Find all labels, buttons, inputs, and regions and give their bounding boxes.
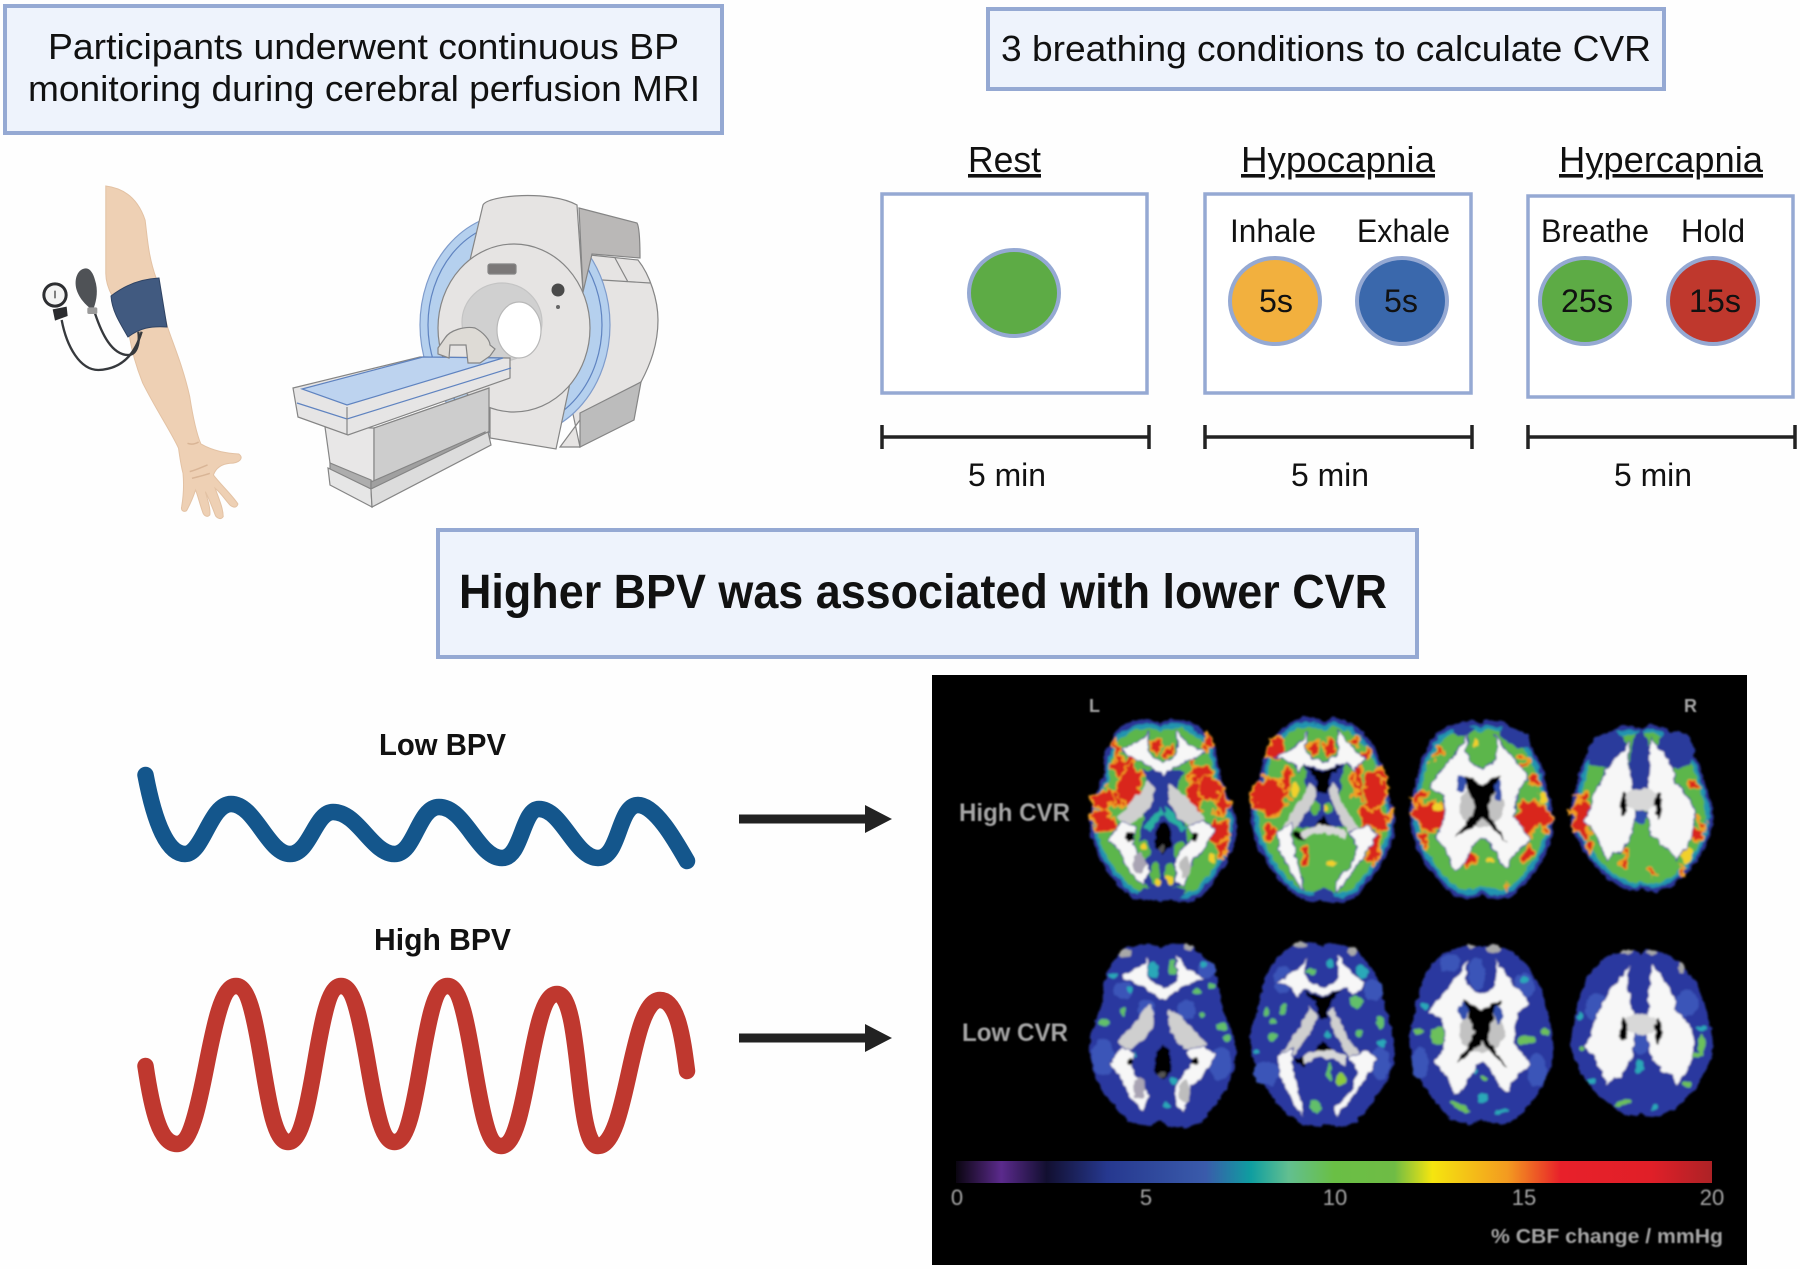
colour scale labels: 0 <box>951 1185 963 1210</box>
panel: CVR brain maps <box>932 675 1747 1265</box>
timeline: hypocapnia 5 min: 5 min <box>1291 457 1369 493</box>
panel: hypocapnia condition <box>1205 194 1471 393</box>
scanner lower panels <box>580 382 641 447</box>
map labels <box>959 696 1697 1047</box>
timeline: rest 5 min: 5 min <box>968 457 1046 493</box>
panel: breathing conditions heading <box>988 9 1664 89</box>
circle: inhale 5s <box>1230 258 1320 344</box>
column title: Rest: Rest <box>968 139 1041 180</box>
panel: hypercapnia condition <box>1528 196 1793 397</box>
panel: rest condition <box>882 194 1147 393</box>
heading text: monitoring <box>28 26 700 109</box>
colour scale labels <box>951 1185 1724 1210</box>
heading text: monitoring: Participants underwent continuous BP <box>48 26 679 67</box>
arm <box>106 186 241 519</box>
circle: breathe 25s: 25s <box>1561 283 1613 319</box>
map labels: High CVR <box>959 799 1070 827</box>
circle: exhale 5s <box>1357 258 1447 344</box>
scanner disc and bore <box>438 244 590 412</box>
panel: monitoring heading <box>5 6 722 133</box>
heading text: breathing conditions: 3 breathing conditions to calculate CVR <box>1001 28 1651 69</box>
colour scale bar <box>956 1161 1712 1183</box>
high CVR slices 1 and 2 <box>1089 717 1395 903</box>
circle: exhale 5s: 5s <box>1384 283 1418 319</box>
colour scale labels: 5 <box>1140 1185 1152 1210</box>
label: high BPV: High BPV <box>374 922 511 957</box>
label: inhale: Inhale <box>1230 213 1316 249</box>
map labels: R <box>1684 696 1697 716</box>
circle: inhale 5s: 5s <box>1259 283 1293 319</box>
label: breathe: Breathe <box>1541 213 1649 249</box>
label: hold: Hold <box>1681 213 1745 249</box>
arrow: high BPV to low CVR <box>739 1024 892 1052</box>
icon: arm with blood pressure cuff <box>42 186 241 519</box>
column title: Hypocapnia: Hypocapnia <box>1241 139 1436 180</box>
colour scale unit: % CBF change / mmHg <box>1491 1226 1723 1248</box>
scanner blue ring <box>420 213 610 437</box>
label: exhale: Exhale <box>1357 213 1450 249</box>
waveform: low BPV <box>146 775 687 861</box>
cuff <box>111 278 167 337</box>
scanner grey back panel <box>579 208 640 292</box>
high CVR slices 3 and 4 <box>1410 720 1713 899</box>
circle: rest <box>969 250 1059 336</box>
arrow: low BPV to high CVR <box>739 805 892 833</box>
table top <box>293 357 511 435</box>
map labels: Low CVR <box>962 1019 1068 1047</box>
low CVR slices 1 and 2 <box>1089 942 1395 1128</box>
waveform: high BPV <box>146 986 687 1146</box>
key finding text: Higher BPV was associated with lower CVR <box>459 566 1387 619</box>
colour scale labels: 20 <box>1700 1185 1724 1210</box>
colour scale labels: 10 <box>1323 1185 1347 1210</box>
heading text: monitoring: monitoring during cerebral perfusion MRI <box>28 68 700 109</box>
map labels: L <box>1089 696 1100 716</box>
timeline: hypocapnia 5 min <box>1205 425 1472 493</box>
head coil <box>438 327 495 363</box>
column title: Hypercapnia: Hypercapnia <box>1559 139 1764 180</box>
circle: hold 15s: 15s <box>1689 283 1741 319</box>
circle: breathe 25s <box>1540 258 1630 344</box>
timeline: hypercapnia 5 min: 5 min <box>1614 457 1692 493</box>
icon: MRI scanner <box>293 196 658 507</box>
timeline: hypercapnia 5 min <box>1528 425 1795 493</box>
panel: key finding <box>438 530 1417 657</box>
brain maps: low CVR row <box>1089 942 1713 1128</box>
gauge, bulb and tubing <box>42 268 142 370</box>
circle: hold 15s <box>1668 258 1758 344</box>
timeline: rest 5 min <box>882 425 1149 493</box>
scanner rear body <box>560 255 658 447</box>
colour scale labels: 15 <box>1512 1185 1536 1210</box>
scanner front housing <box>470 196 583 449</box>
label: low BPV: Low BPV <box>379 727 506 762</box>
table pedestal <box>325 388 491 507</box>
brain maps: high CVR row <box>1089 717 1713 903</box>
low CVR slices 3 and 4 <box>1410 944 1713 1124</box>
